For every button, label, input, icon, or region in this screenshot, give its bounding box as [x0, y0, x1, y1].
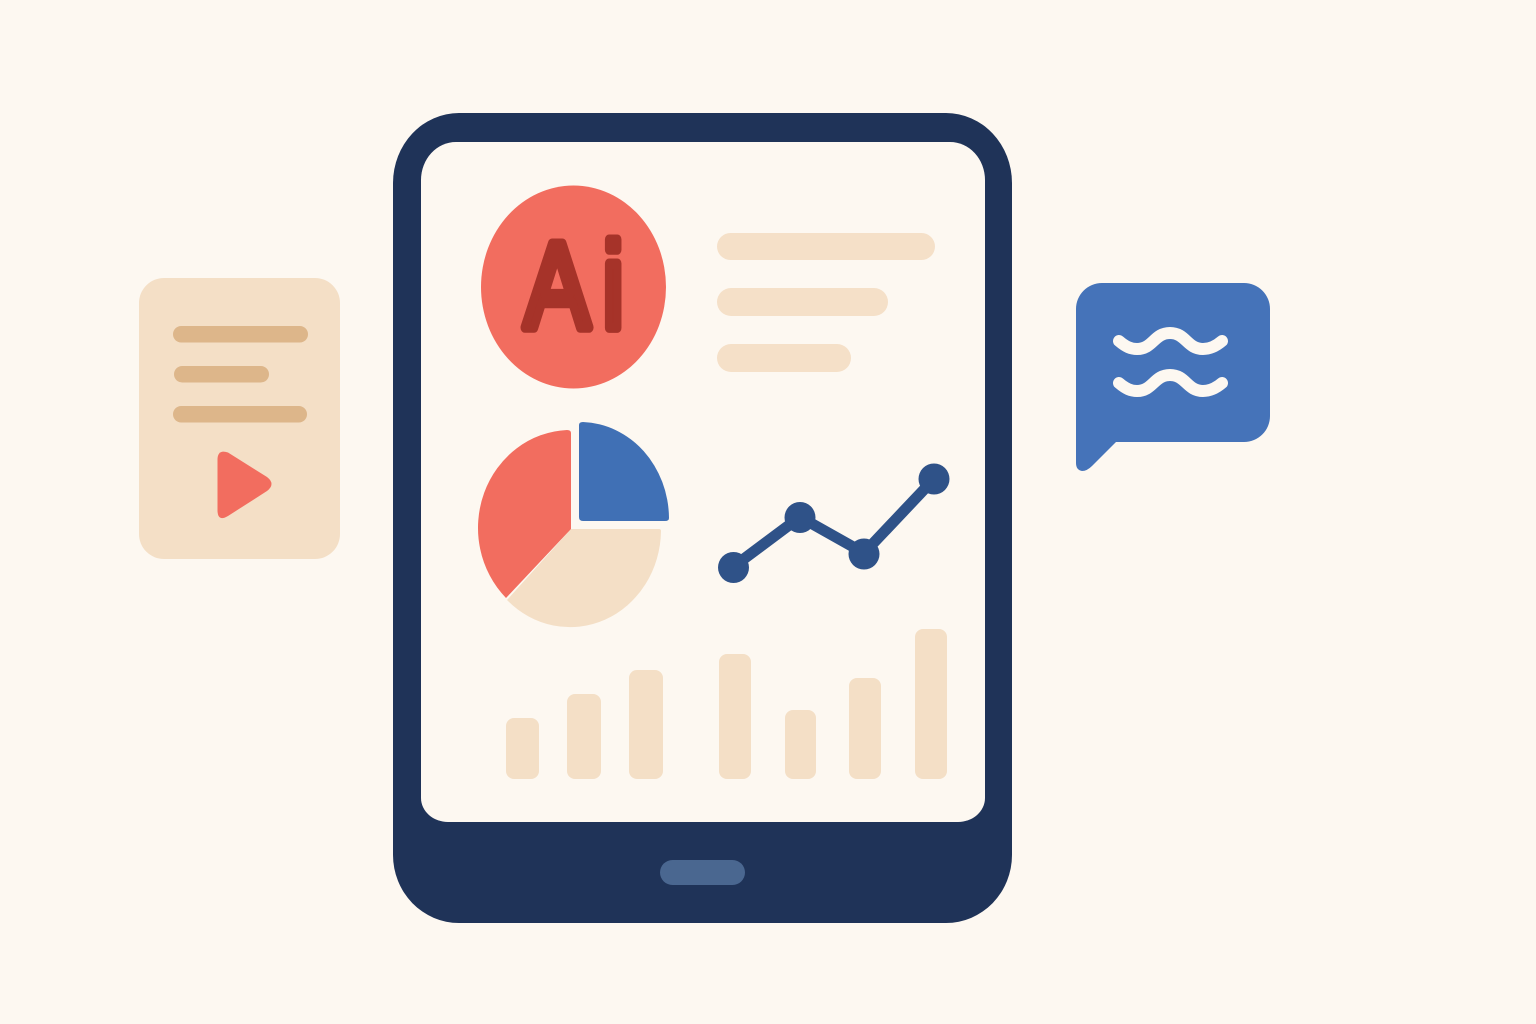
bar 5	[785, 710, 816, 779]
bar 2	[567, 694, 601, 779]
icon: speech bubble	[1076, 283, 1270, 471]
data point 2	[784, 502, 816, 533]
document text line 3	[173, 406, 307, 422]
bar 7	[915, 629, 947, 779]
wave line 2	[1119, 375, 1222, 391]
bar 3	[629, 670, 663, 779]
data point 1	[718, 552, 749, 583]
panel: document card	[139, 278, 340, 559]
document text line 1	[173, 326, 308, 342]
icon: play triangle	[218, 452, 272, 518]
home button	[660, 860, 745, 885]
text placeholder lines	[717, 233, 935, 372]
bar 6	[849, 678, 881, 779]
placeholder line 1	[717, 233, 935, 260]
bar 1	[506, 718, 539, 779]
pie slice: beige	[507, 529, 661, 627]
tablet body	[393, 113, 1012, 923]
pie slice: red	[478, 430, 571, 598]
tablet screen	[421, 142, 985, 822]
bar chart	[506, 629, 947, 779]
bar 4	[719, 654, 751, 779]
data point 3	[848, 538, 880, 570]
icon: Ai badge	[481, 186, 666, 388]
data point 4	[918, 464, 950, 494]
placeholder line 3	[717, 344, 851, 372]
pie chart	[478, 422, 669, 627]
Ai label: Ai	[524, 218, 624, 354]
line chart	[718, 464, 950, 583]
tablet device	[393, 113, 1012, 923]
document text line 2	[174, 366, 269, 382]
pie slice: blue	[579, 422, 669, 521]
wave line 1	[1119, 333, 1222, 349]
placeholder line 2	[717, 288, 888, 316]
